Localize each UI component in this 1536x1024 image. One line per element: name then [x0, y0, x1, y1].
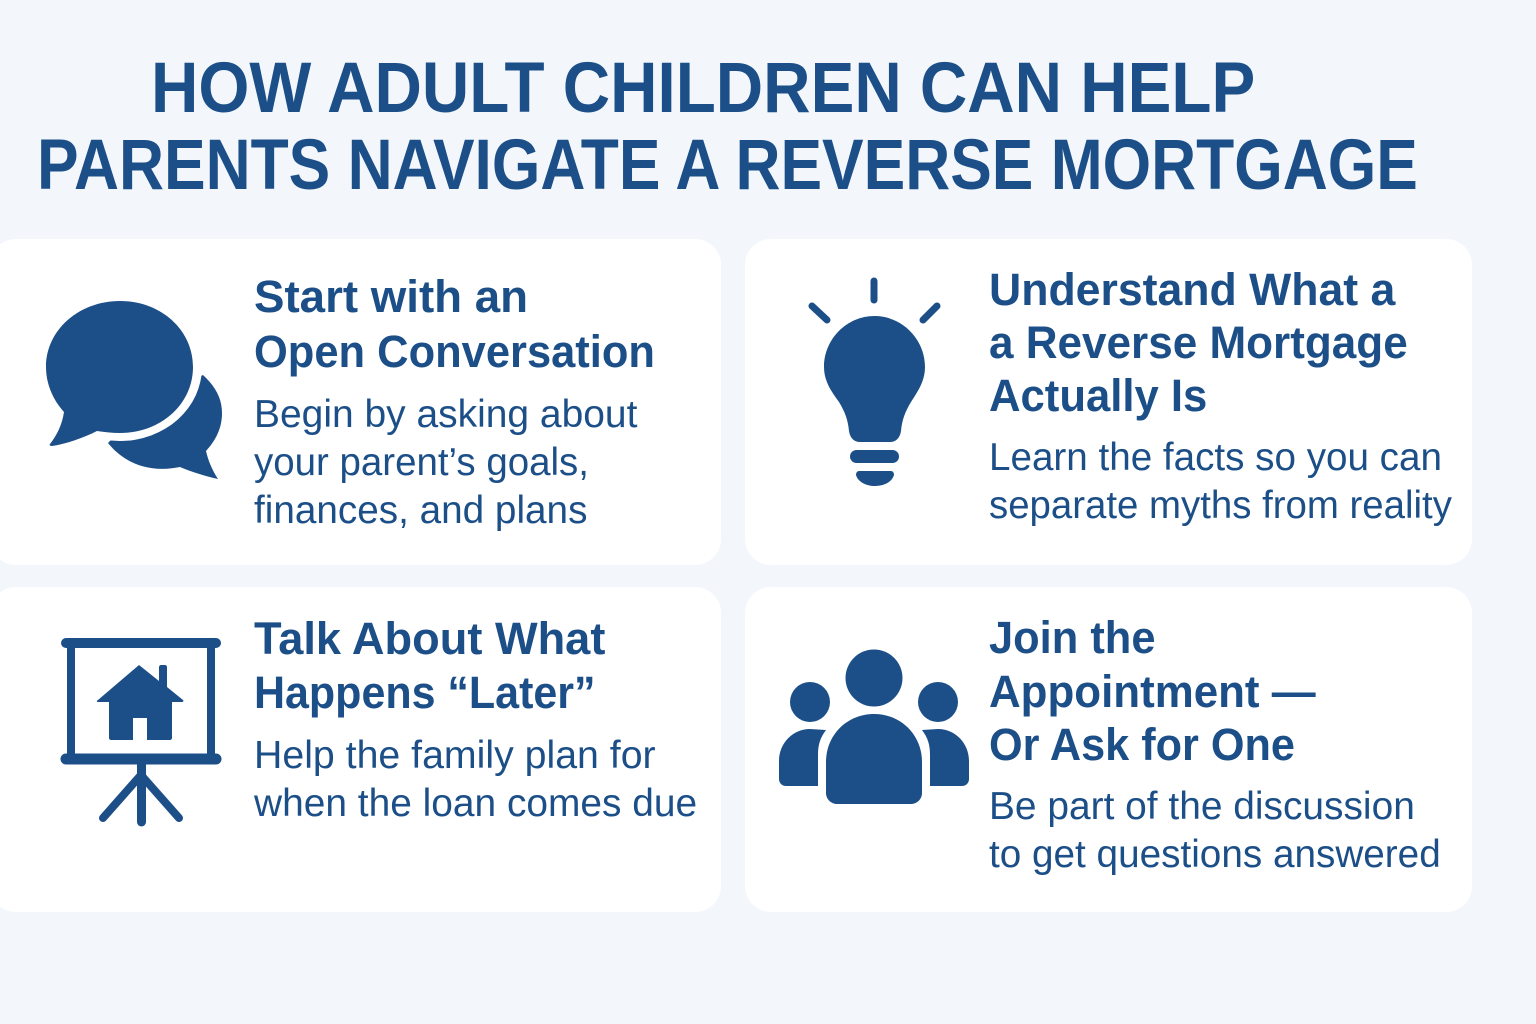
- heading: a Reverse Mortgage: [989, 317, 1408, 368]
- heading: Happens “Later”: [254, 667, 596, 718]
- body text: finances, and plans: [254, 489, 587, 532]
- heading: Join the: [989, 612, 1155, 663]
- icon: house on presentation board: [60, 638, 222, 826]
- title: HOW ADULT CHILDREN CAN HELP: [151, 49, 1255, 128]
- panel: understand: [745, 239, 1472, 565]
- body text: separate myths from reality: [989, 484, 1452, 527]
- icon: group of people: [779, 650, 969, 804]
- heading: [989, 612, 1316, 770]
- heading: Talk About What: [254, 613, 605, 664]
- body text: when the loan comes due: [254, 782, 697, 825]
- icon: speech bubbles: [46, 301, 222, 479]
- heading: [254, 613, 605, 718]
- heading: Start with an: [254, 271, 528, 322]
- heading: [989, 264, 1408, 421]
- heading: Understand What a: [989, 264, 1395, 315]
- heading: [254, 271, 655, 377]
- heading: Or Ask for One: [989, 719, 1295, 770]
- title: PARENTS NAVIGATE A REVERSE MORTGAGE: [37, 126, 1418, 205]
- heading: Open Conversation: [254, 326, 655, 377]
- panel: later: [0, 587, 721, 912]
- panel: open conversation: [0, 239, 721, 565]
- icon: light bulb: [808, 278, 940, 486]
- title: [37, 49, 1418, 205]
- body text: Be part of the discussion: [989, 785, 1415, 828]
- body text: [254, 734, 697, 825]
- body text: your parent’s goals,: [254, 441, 589, 484]
- body text: Learn the facts so you can: [989, 436, 1442, 479]
- heading: Appointment —: [989, 666, 1316, 716]
- body text: Help the family plan for: [254, 734, 656, 777]
- panel: appointment: [745, 587, 1472, 912]
- heading: Actually Is: [989, 370, 1207, 421]
- body text: to get questions answered: [989, 833, 1441, 876]
- body text: [254, 393, 638, 532]
- body text: [989, 785, 1441, 876]
- body text: [989, 436, 1452, 527]
- body text: Begin by asking about: [254, 393, 637, 436]
